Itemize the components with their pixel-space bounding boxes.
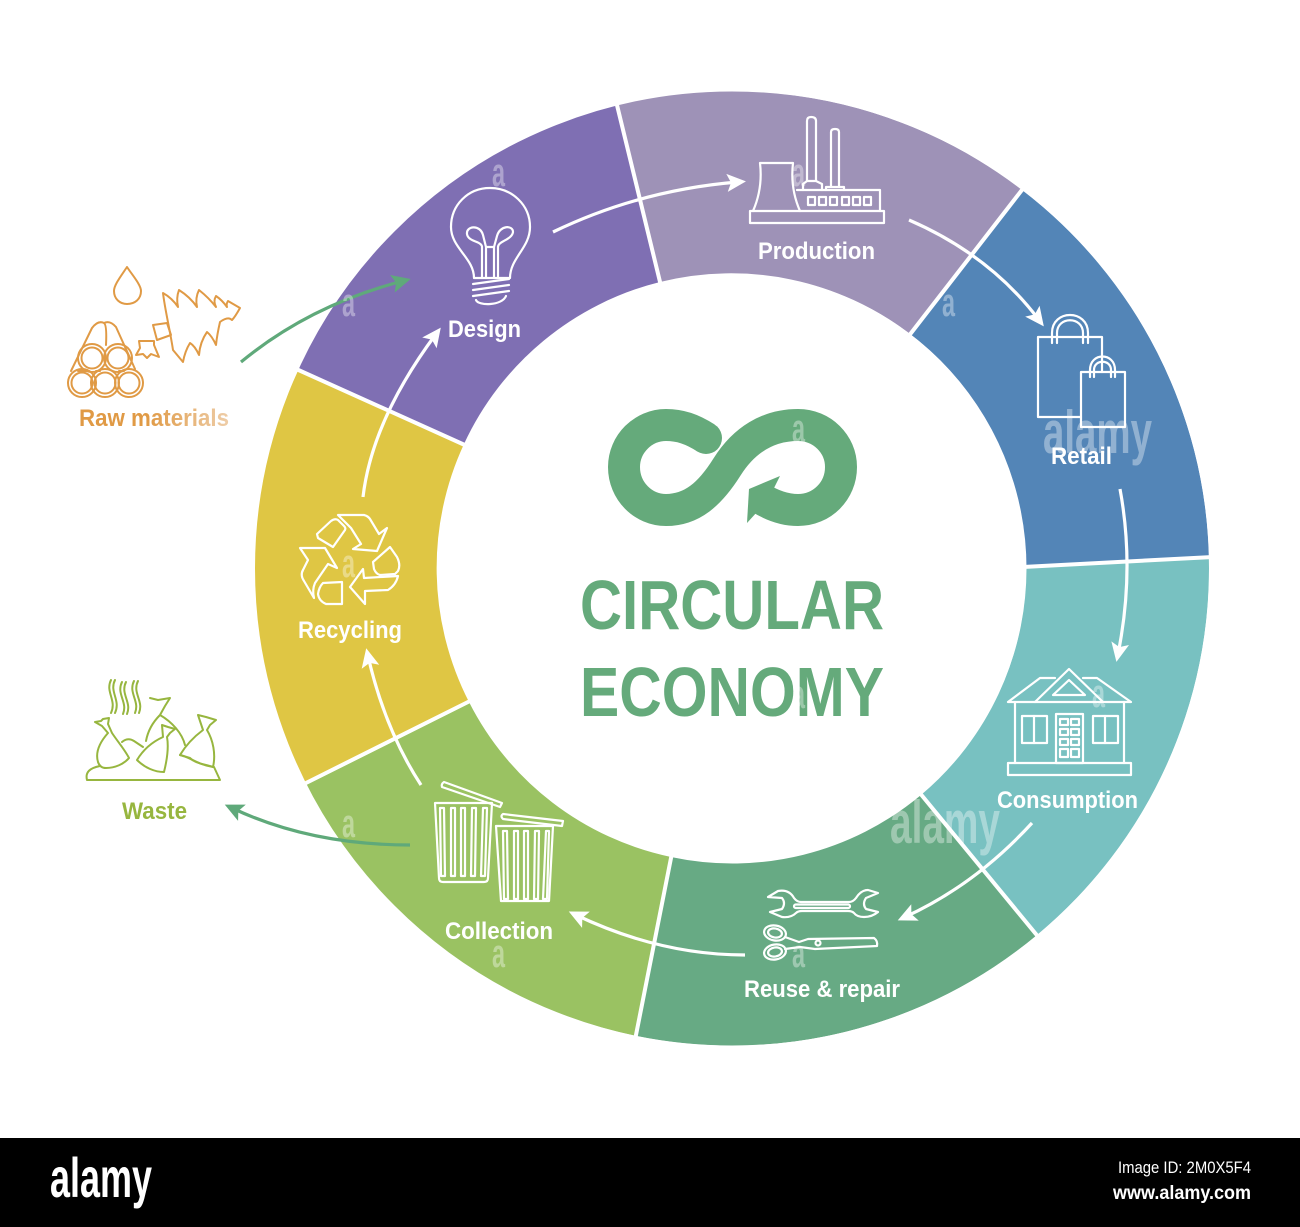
icon: factory (750, 117, 884, 223)
label: waste: Waste (122, 798, 187, 825)
arrow: collection to recycling (368, 656, 421, 785)
arrow: consumption to reuse (905, 823, 1032, 917)
icon: trash bins (435, 782, 563, 901)
arrow: production to retail (909, 220, 1039, 320)
title (580, 566, 884, 731)
watermarks: a (792, 407, 805, 451)
image id: Image ID: 2M0X5F4 (1118, 1158, 1251, 1177)
label: design: Design (448, 316, 521, 343)
watermarks: a (1092, 672, 1105, 716)
icon: wrench and scissors (763, 890, 878, 961)
segment: consumption (921, 557, 1209, 935)
icon: recycling arrows (300, 515, 399, 604)
arrow: raw materials to design (241, 281, 403, 362)
label: consumption: Consumption (997, 787, 1138, 814)
arrow: retail to consumption (1118, 489, 1127, 654)
label: reuse and repair: Reuse & repair (744, 976, 900, 1003)
icon: raw materials (68, 267, 240, 397)
icon: shopping bags (1038, 315, 1125, 427)
watermarks: a (492, 932, 505, 976)
watermarks: a (792, 673, 805, 717)
label: production: Production (758, 238, 875, 265)
segment: design (298, 105, 660, 444)
icon: waste bags (87, 680, 220, 780)
label: recycling: Recycling (298, 617, 402, 644)
segment: recycling (254, 370, 469, 783)
arrows between stages (232, 182, 1127, 955)
title: CIRCULAR (580, 566, 884, 644)
label: collection: Collection (445, 918, 553, 945)
logo: infinity loop with arrow (624, 422, 841, 523)
watermarks (342, 151, 1152, 976)
footer bar (0, 1138, 1300, 1227)
watermarks: alamy (890, 789, 1000, 856)
arrow: recycling to design (363, 334, 436, 497)
watermarks: a (942, 281, 955, 325)
segment: collection (305, 702, 671, 1036)
watermarks: a (342, 802, 355, 846)
website: www.alamy.com (1112, 1183, 1251, 1204)
arrow: design to production (553, 182, 738, 232)
title: ECONOMY (580, 653, 884, 731)
label: raw materials: Raw materials (79, 405, 229, 432)
watermarks: alamy (1043, 399, 1152, 466)
watermarks: a (792, 151, 805, 195)
segment: production (617, 91, 1022, 334)
icon: light bulb (451, 188, 530, 304)
footer logo: alamy (50, 1146, 152, 1209)
watermarks: a (792, 932, 805, 976)
watermarks: a (342, 281, 355, 325)
segment: retail (910, 190, 1209, 567)
arrow: reuse to collection (576, 915, 745, 955)
label: retail: Retail (1051, 443, 1112, 470)
watermarks: a (492, 151, 505, 195)
arrow: collection to waste (232, 808, 410, 845)
segment: reuse and repair (636, 795, 1037, 1046)
icon: house (1008, 669, 1131, 775)
watermarks: a (342, 542, 355, 586)
circular ring (252, 88, 1213, 1048)
